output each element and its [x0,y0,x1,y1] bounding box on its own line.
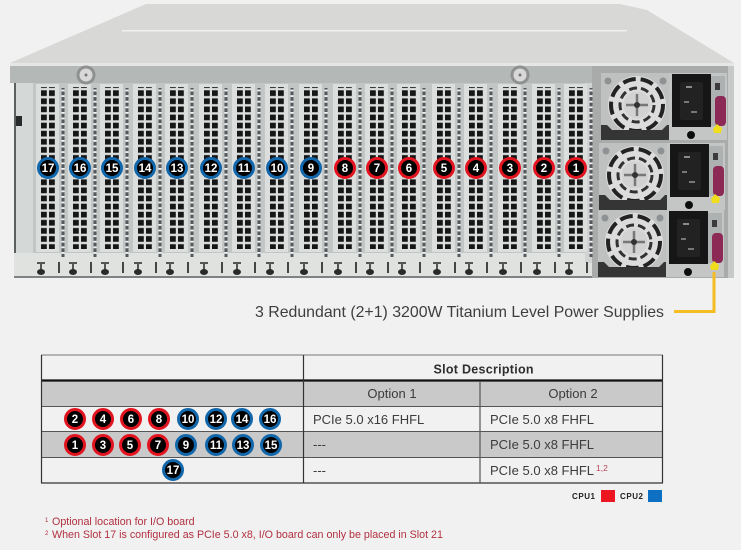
slot number badges on chassis: 1 [573,163,580,175]
slot number badges on chassis: 5 [441,163,448,175]
row 1 slot badges: 10 [182,414,194,426]
slot number badges on chassis: 2 [541,163,547,175]
row 3 option values: PCIe 5.0 x8 FHFL [490,463,594,478]
slot number badges on chassis: 7 [374,163,380,175]
slot number badges on chassis: 10 [271,163,283,175]
table grid lines [41,355,663,483]
chassis top cover [10,4,734,63]
row 2 slot badges: 5 [127,440,134,452]
CPU legend: CPU1 [572,492,596,501]
callout: power supplies: 3 Redundant (2+1) 3200W Titanium Level Power Supplies [255,304,664,321]
row 3 option values: 1,2 [596,463,608,473]
power supply 2 [599,143,725,210]
slot number badges on chassis: 16 [74,163,86,175]
table heading: Slot Description [434,362,534,376]
row 2 slot badges: 7 [155,440,161,452]
footnote 2: 2 [45,531,49,537]
row 3 option values: --- [313,463,326,478]
slot number badges on chassis: 3 [507,163,513,175]
row 1 slot badges: 16 [264,414,276,426]
footnote 1: 1 [45,518,49,524]
row 2 slot badges: 9 [183,440,189,452]
row 3 slot badge [164,460,182,480]
thumbscrew left [76,66,96,84]
callout arrow to power supplies [674,272,714,312]
row 2 slot badges: 3 [100,440,106,452]
slot number badges on chassis [38,158,586,178]
footnote 1: Optional location for I/O board [52,516,195,528]
row 2 option values: PCIe 5.0 x8 FHFL [490,437,594,452]
row 1 slot badges: 2 [72,414,78,426]
slot number badges on chassis: 12 [205,163,217,175]
row 2 option values [313,437,594,452]
row 1 option values: PCIe 5.0 x16 FHFL [313,412,424,427]
slot number badges on chassis: 11 [238,163,251,175]
column heading: option 2: Option 2 [548,386,598,401]
row 2 slot badges: 15 [265,440,278,452]
slot number badges on chassis: 13 [171,163,183,175]
server chassis rear view [10,4,734,278]
footnotes [45,516,443,541]
CPU legend: CPU2 [620,492,644,501]
row 2 slot badges: 13 [237,440,249,452]
slot number badges on chassis: 14 [139,163,152,175]
expansion slot brackets [36,84,592,275]
row 2 slot badges [66,436,280,454]
table row shading [41,381,663,457]
slot number badges on chassis: 9 [308,163,314,175]
power supply 3 [598,210,724,277]
footnote 2: When Slot 17 is configured as PCIe 5.0 x8, I/O board can only be placed in Slot 21 [52,529,443,541]
slot number badges on chassis: 6 [406,163,412,175]
row 1 slot badges: 12 [210,414,222,426]
slot number badges on chassis: 8 [342,163,349,175]
power supply 1 [601,73,727,140]
row 3 slot badge: 17 [167,465,179,477]
row 1 option values [313,412,594,427]
thumbscrew right [510,66,530,84]
row 2 slot badges: 11 [210,440,223,452]
column heading: option 1: Option 1 [367,386,417,401]
row 1 slot badges: 14 [236,414,249,426]
slot description table [41,355,663,483]
row 1 slot badges: 6 [128,414,134,426]
row 1 slot badges: 8 [156,414,163,426]
slot number badges on chassis: 17 [42,163,54,175]
row 3 option values [313,463,608,478]
row 2 option values: --- [313,437,326,452]
CPU legend [572,490,662,502]
row 2 slot badges: 1 [72,440,79,452]
slot number badges on chassis: 15 [106,163,119,175]
slot number badges on chassis: 4 [473,163,480,175]
row 1 slot badges: 4 [100,414,107,426]
row 1 option values: PCIe 5.0 x8 FHFL [490,412,594,427]
chassis rear face [10,63,734,278]
row 1 slot badges [66,410,280,428]
